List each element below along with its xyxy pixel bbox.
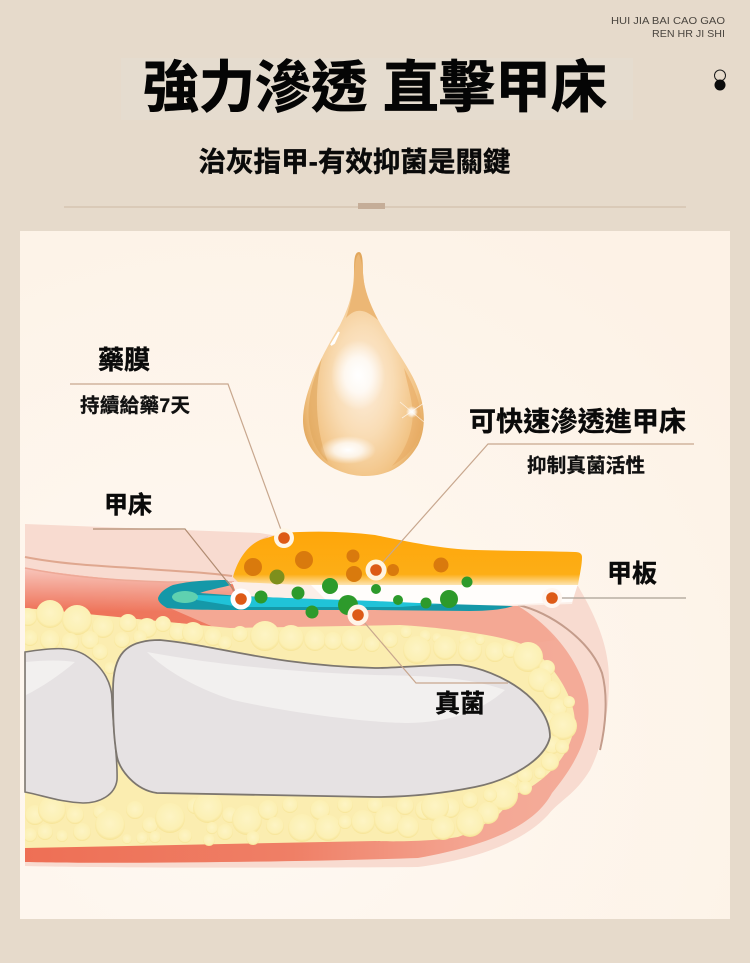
title backing xyxy=(121,58,633,120)
leader lines xyxy=(70,384,694,683)
marker: 真菌 xyxy=(348,604,368,626)
title: 強力滲透 直擊甲床 xyxy=(143,56,607,119)
fungi: brown spots in film xyxy=(244,550,448,582)
label: 抑制真菌活性: 抑制真菌活性 xyxy=(527,454,645,477)
brand text: REN HR JI SHI xyxy=(652,28,725,40)
subtitle: 治灰指甲-有效抑菌是關鍵 xyxy=(198,146,510,177)
medicated film layer xyxy=(233,532,582,585)
label: 真菌: 真菌 xyxy=(435,690,485,718)
pale shadow beside film xyxy=(234,536,268,580)
panel: diagram background xyxy=(20,231,730,919)
icon: golden serum drop xyxy=(303,252,424,476)
brand text: HUI JIA BAI CAO GAO xyxy=(611,15,725,27)
label: 藥膜: 藥膜 xyxy=(98,345,150,375)
finger illustration xyxy=(19,384,694,868)
marker: 甲板 xyxy=(542,588,562,608)
marker: 藥膜 xyxy=(274,528,294,548)
red layer highlight xyxy=(25,568,240,612)
pink band under nail xyxy=(165,606,555,645)
marker: 甲床 xyxy=(230,588,252,610)
icon: toggle dots xyxy=(714,70,726,90)
finger bone: left phalanx xyxy=(25,649,117,803)
skin fold lines xyxy=(25,557,606,750)
marker: 滲透 xyxy=(366,560,386,580)
skin: outer layer xyxy=(25,524,609,868)
label: 持續給藥7天: 持續給藥7天 xyxy=(80,394,190,417)
divider xyxy=(64,203,686,209)
nail plate xyxy=(232,582,578,606)
label: 甲床: 甲床 xyxy=(104,492,152,519)
label: 可快速滲透進甲床: 可快速滲透進甲床 xyxy=(469,407,686,437)
bone highlight xyxy=(147,652,505,723)
label: 甲板: 甲板 xyxy=(607,560,657,588)
fungi: green spots xyxy=(254,570,472,618)
skin: inner red layer xyxy=(25,568,589,863)
brand text xyxy=(611,15,725,40)
fat tissue xyxy=(19,600,577,848)
finger bone: right phalanx xyxy=(113,640,550,797)
nail bed: teal layer xyxy=(158,580,513,611)
